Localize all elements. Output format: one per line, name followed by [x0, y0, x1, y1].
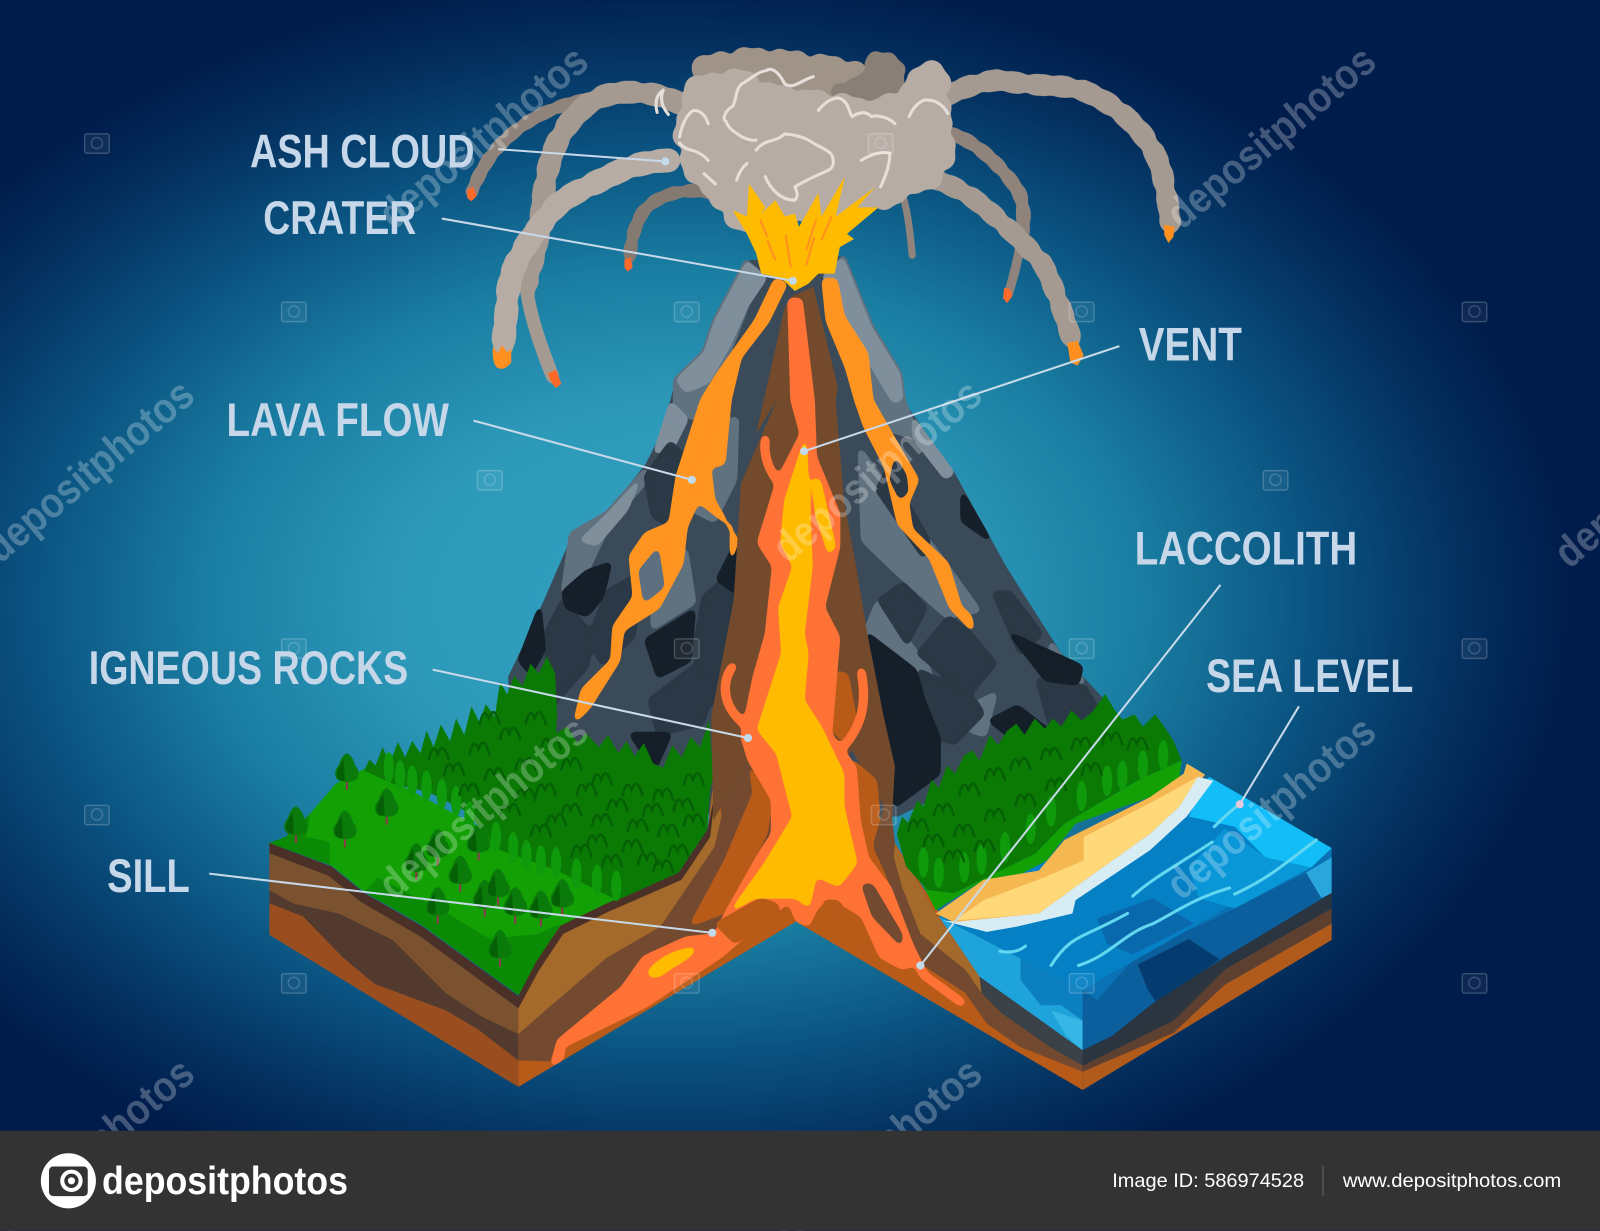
- vent: magma arms and tail: [725, 439, 961, 1002]
- lava: right flow: [823, 280, 972, 630]
- near-black rocks: [519, 493, 1082, 806]
- sea: sub-seabed orange: [1083, 924, 1332, 1090]
- soil crust left: [269, 792, 715, 1008]
- plume: inner left: [630, 191, 713, 260]
- right block: soil layers: [796, 700, 1083, 1090]
- soil: right ochre: [894, 843, 982, 993]
- sea: right face deep patch: [1138, 939, 1219, 1005]
- watermarks: depositphotos: [763, 370, 991, 572]
- watermarks: depositphotos: [1157, 707, 1385, 909]
- forest: tree tops left: [429, 712, 704, 873]
- mountain body: [508, 256, 1107, 817]
- ground: left meadow: [269, 768, 617, 995]
- sea: left front face: [939, 917, 1083, 1050]
- line: laccolith: [916, 585, 1220, 970]
- plume: front left: [503, 160, 668, 350]
- plume: upper left long: [527, 92, 680, 378]
- sea block: [936, 763, 1332, 1090]
- vent: yellow inner blob: [812, 477, 836, 555]
- cloud: dark tuft: [839, 59, 898, 114]
- sea: mid blue surface: [1189, 829, 1311, 908]
- line: sill: [209, 874, 716, 937]
- soil: upper layer: [269, 843, 518, 1034]
- vent: orange-brown side pods: [689, 671, 891, 927]
- ground and forest right: [897, 694, 1182, 910]
- ground: darker front band: [269, 813, 560, 995]
- sea: left face pale corner: [1051, 1010, 1083, 1050]
- forest: pale tree edge right: [918, 740, 1168, 888]
- plume: right dark: [948, 134, 1023, 295]
- beach: outer sand: [936, 763, 1205, 924]
- line: lava flow: [473, 421, 696, 484]
- label: vent: VENT: [1139, 318, 1242, 370]
- burning plume tips: [467, 187, 1174, 388]
- line: crater: [442, 219, 797, 285]
- line: vent: [800, 346, 1119, 455]
- soil: right face base: [796, 817, 1083, 1090]
- pale grey summit rocks: [579, 256, 955, 546]
- label: crater: CRATER: [263, 192, 416, 244]
- labels: [89, 126, 1413, 902]
- lava flow holes: [639, 456, 908, 603]
- plume: small centre right: [900, 187, 912, 255]
- left block: soil layers: [269, 714, 796, 1087]
- cloud: main mass: [685, 68, 945, 221]
- forest: pale tree edge left: [384, 752, 621, 901]
- vent: brown eye pod: [861, 884, 902, 947]
- lava fountain: [733, 177, 879, 291]
- lava: left flow: [576, 280, 786, 721]
- sea: corner light patch: [1306, 857, 1332, 898]
- soil: right brown: [872, 700, 1083, 1072]
- sea: dark floor patch: [1097, 898, 1194, 954]
- trees: meadow: [284, 753, 574, 967]
- image id: Image ID: 586974528: [1112, 1170, 1304, 1192]
- vent: magma orange body: [550, 298, 961, 1069]
- vent: brown column: [711, 287, 895, 837]
- volcano mountain: [508, 256, 1107, 817]
- website: www.depositphotos.com: [1342, 1170, 1561, 1192]
- logo text: depositphotos: [102, 1160, 348, 1203]
- soil: section ochre: [518, 790, 721, 1034]
- label: ash cloud: ASH CLOUD: [250, 126, 474, 178]
- soil: dark middle layer: [269, 890, 518, 1060]
- watermarks: depositphotos: [1157, 36, 1385, 238]
- ash cloud: [656, 59, 948, 221]
- plume: right long: [943, 80, 1170, 227]
- plume: far left thin: [471, 100, 584, 193]
- beach: inner sand: [954, 777, 1198, 921]
- icon: camera logo: [41, 1153, 96, 1208]
- soil: right dark layer: [980, 977, 1083, 1066]
- sea: right face light top: [1083, 848, 1332, 1000]
- ground: right band: [897, 760, 1182, 910]
- beach: foam: [943, 777, 1213, 932]
- label: sill: SILL: [107, 850, 190, 902]
- central vent section: [550, 287, 961, 1069]
- vent: yellow core: [648, 298, 857, 977]
- soil: left face base: [269, 843, 518, 1087]
- cloud: grey top layer: [704, 59, 878, 123]
- watermarks: depositphotos: [369, 36, 597, 238]
- label: sea level: SEA LEVEL: [1206, 650, 1413, 702]
- forest: tree tops right: [908, 733, 1148, 862]
- line: ash cloud: [498, 149, 669, 166]
- dark rocks: [546, 443, 1101, 743]
- footer bar: [0, 1131, 1600, 1231]
- soil: section face base: [518, 790, 796, 1087]
- sea: pale back water: [1189, 777, 1332, 868]
- sea: sub-seabed rock: [1083, 893, 1332, 1066]
- sea: left face deep band: [1020, 956, 1083, 1021]
- leader lines: [209, 149, 1299, 970]
- surface lava flows: [576, 280, 972, 721]
- label: igneous rocks: IGNEOUS ROCKS: [89, 642, 408, 694]
- watermarks: depositphotos: [369, 707, 597, 909]
- label: laccolith: LACCOLITH: [1135, 522, 1357, 574]
- line: igneous rocks: [433, 670, 752, 742]
- light slate rocks: [563, 256, 1084, 735]
- forest: left: [364, 656, 713, 900]
- soil: section brown: [518, 714, 776, 1061]
- line: sea level: [1236, 706, 1299, 808]
- plume: right front: [929, 177, 1072, 342]
- forest: right: [897, 694, 1182, 893]
- waves: [1000, 804, 1316, 966]
- ash plumes: [471, 80, 1170, 378]
- cloud: pale swirl lines: [656, 69, 948, 200]
- sea: right front face: [1083, 848, 1332, 1050]
- sea: top surface: [939, 777, 1332, 990]
- vent: dark orange lower pods: [714, 898, 891, 980]
- sea: sub-seabed brown: [1083, 908, 1332, 1072]
- label: lava flow: LAVA FLOW: [227, 394, 450, 446]
- ground and forest left: [269, 656, 715, 1008]
- magma: yellow pocket: [648, 947, 696, 977]
